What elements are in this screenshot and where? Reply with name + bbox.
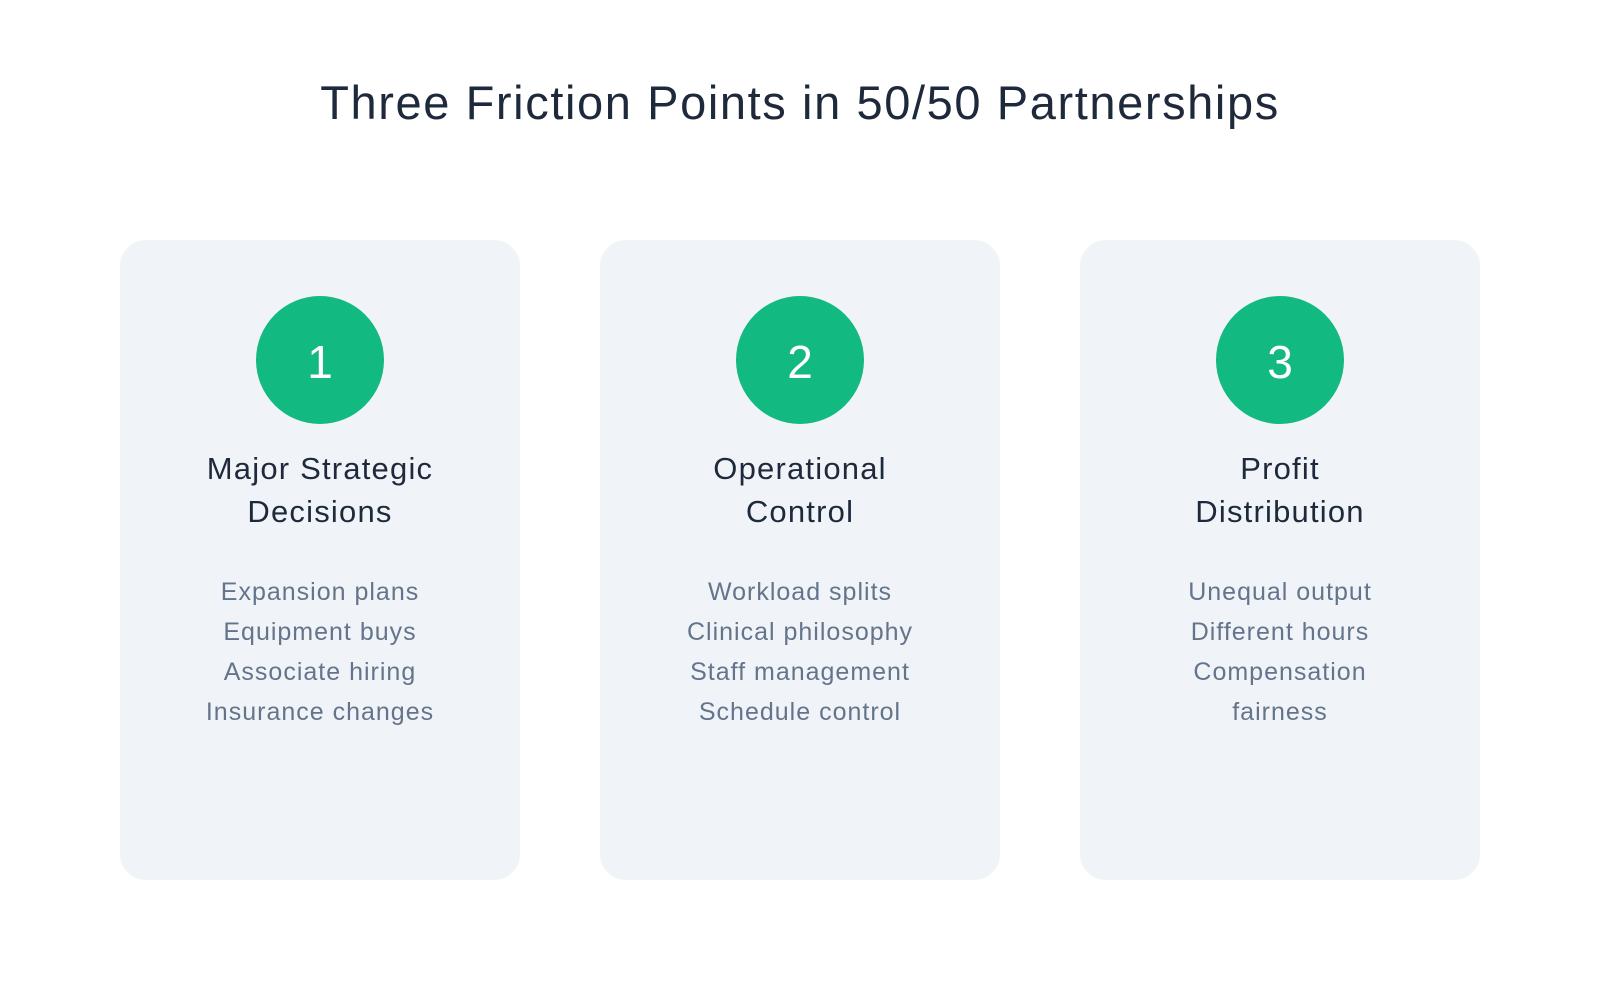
text block: strategic items: Insurance changes <box>206 698 434 726</box>
heading: operational control <box>713 451 887 529</box>
text block: operational items: Schedule control <box>699 698 901 726</box>
icon: number 3 <box>1216 296 1344 424</box>
panel: operational control <box>600 240 1000 880</box>
text block: strategic items <box>206 578 434 726</box>
icon: number 1: 1 <box>307 336 333 388</box>
heading: operational control: Control <box>746 494 854 529</box>
heading: profit distribution: Profit <box>1240 451 1320 486</box>
icon: number 3: 3 <box>1267 336 1293 388</box>
icon: number 2 <box>736 296 864 424</box>
heading: profit distribution: Distribution <box>1195 494 1365 529</box>
text block: profit items: Unequal output <box>1188 578 1372 606</box>
text block: strategic items: Equipment buys <box>223 618 417 646</box>
text block: strategic items: Associate hiring <box>224 658 416 686</box>
text block: operational items: Clinical philosophy <box>687 618 913 646</box>
text block: profit items <box>1188 578 1372 726</box>
text block: profit items: Compensation <box>1193 658 1367 686</box>
heading: major strategic decisions: Major Strategic <box>207 451 433 486</box>
heading: profit distribution <box>1195 451 1365 529</box>
text block: profit items: Different hours <box>1191 618 1369 646</box>
title: Three Friction Points in 50/50 Partnerships <box>320 76 1280 129</box>
heading: operational control: Operational <box>713 451 887 486</box>
text block: strategic items: Expansion plans <box>221 578 419 606</box>
text block: operational items <box>687 578 913 726</box>
icon: number 2: 2 <box>787 336 813 388</box>
icon: number 1 <box>256 296 384 424</box>
text block: operational items: Workload splits <box>708 578 892 606</box>
text block: profit items: fairness <box>1232 698 1328 726</box>
heading: major strategic decisions: Decisions <box>247 494 393 529</box>
heading: major strategic decisions <box>207 451 433 529</box>
panel: profit distribution <box>1080 240 1480 880</box>
text block: operational items: Staff management <box>690 658 910 686</box>
panel: major strategic decisions <box>120 240 520 880</box>
